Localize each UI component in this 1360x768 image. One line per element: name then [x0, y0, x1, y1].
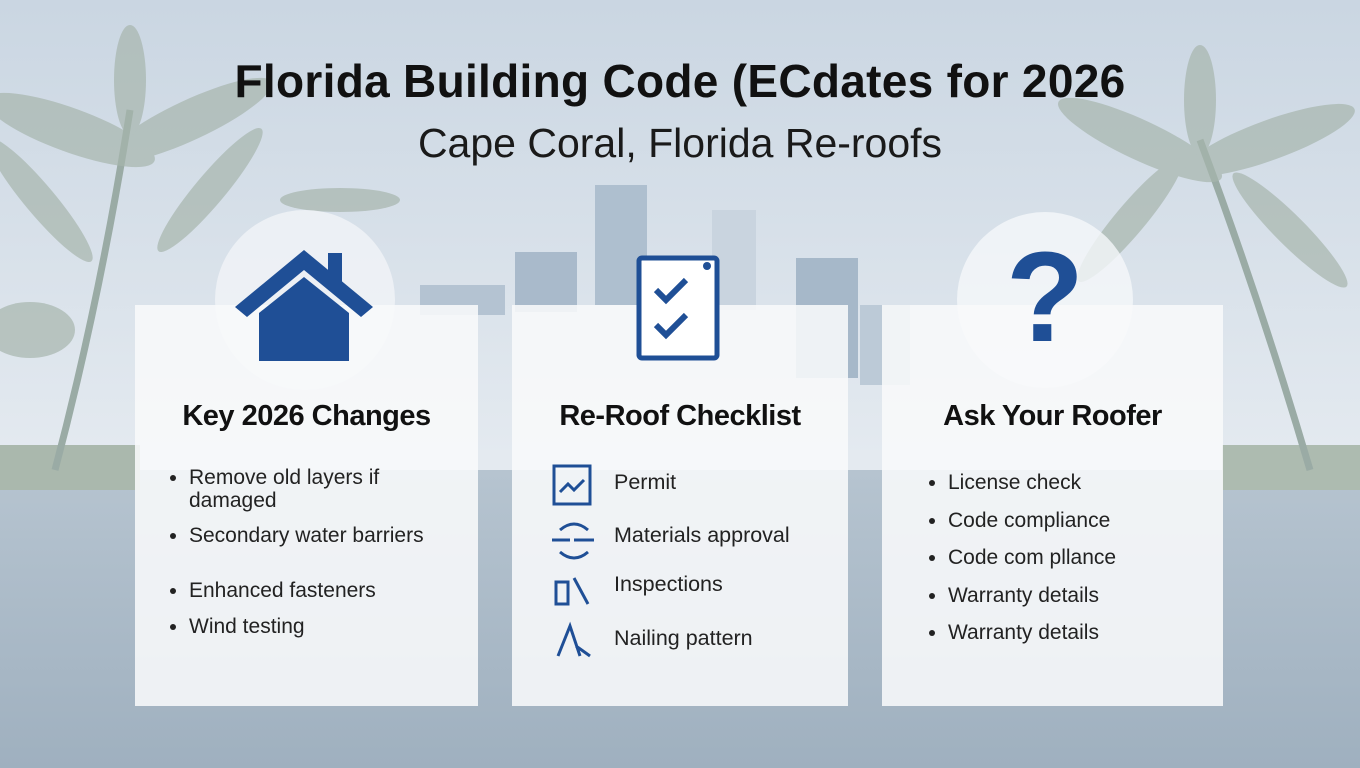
panel: key changes: Key 2026 Changes [182, 400, 431, 432]
icon: question mark: ? [1006, 226, 1084, 369]
panel: ask roofer [882, 305, 1223, 706]
panel: checklist: Nailing pattern [614, 626, 753, 650]
panel: checklist: Inspections [614, 572, 723, 596]
panel: checklist: Materials approval [614, 523, 790, 547]
panel: key changes: Wind testing [189, 615, 305, 638]
panel: key changes: Enhanced fasteners [189, 579, 376, 602]
subtitle: Cape Coral, Florida Re-roofs [418, 120, 942, 166]
panel: ask roofer: License check [948, 471, 1081, 494]
icon: house [235, 250, 373, 361]
panel: ask roofer: Code compliance [948, 508, 1110, 532]
panel: checklist: Re-Roof Checklist [559, 400, 801, 432]
panel: ask roofer: Code com pllance [948, 546, 1116, 569]
panel: checklist [512, 305, 848, 706]
panel: ask roofer: Warranty details [948, 584, 1099, 606]
panel: ask roofer: Ask Your Roofer [943, 400, 1162, 432]
checklist small icons [552, 464, 594, 658]
panel: key changes: Secondary water barriers [189, 524, 424, 547]
panel: checklist: Permit [614, 470, 676, 494]
panel: key changes [135, 305, 478, 706]
icon: checklist [636, 256, 720, 360]
panel: key changes: Remove old layers if damaged [189, 466, 379, 512]
palms [55, 110, 1310, 470]
panel: ask roofer: Warranty details [948, 621, 1099, 644]
title: Florida Building Code (ECdates for 2026 [235, 55, 1125, 107]
